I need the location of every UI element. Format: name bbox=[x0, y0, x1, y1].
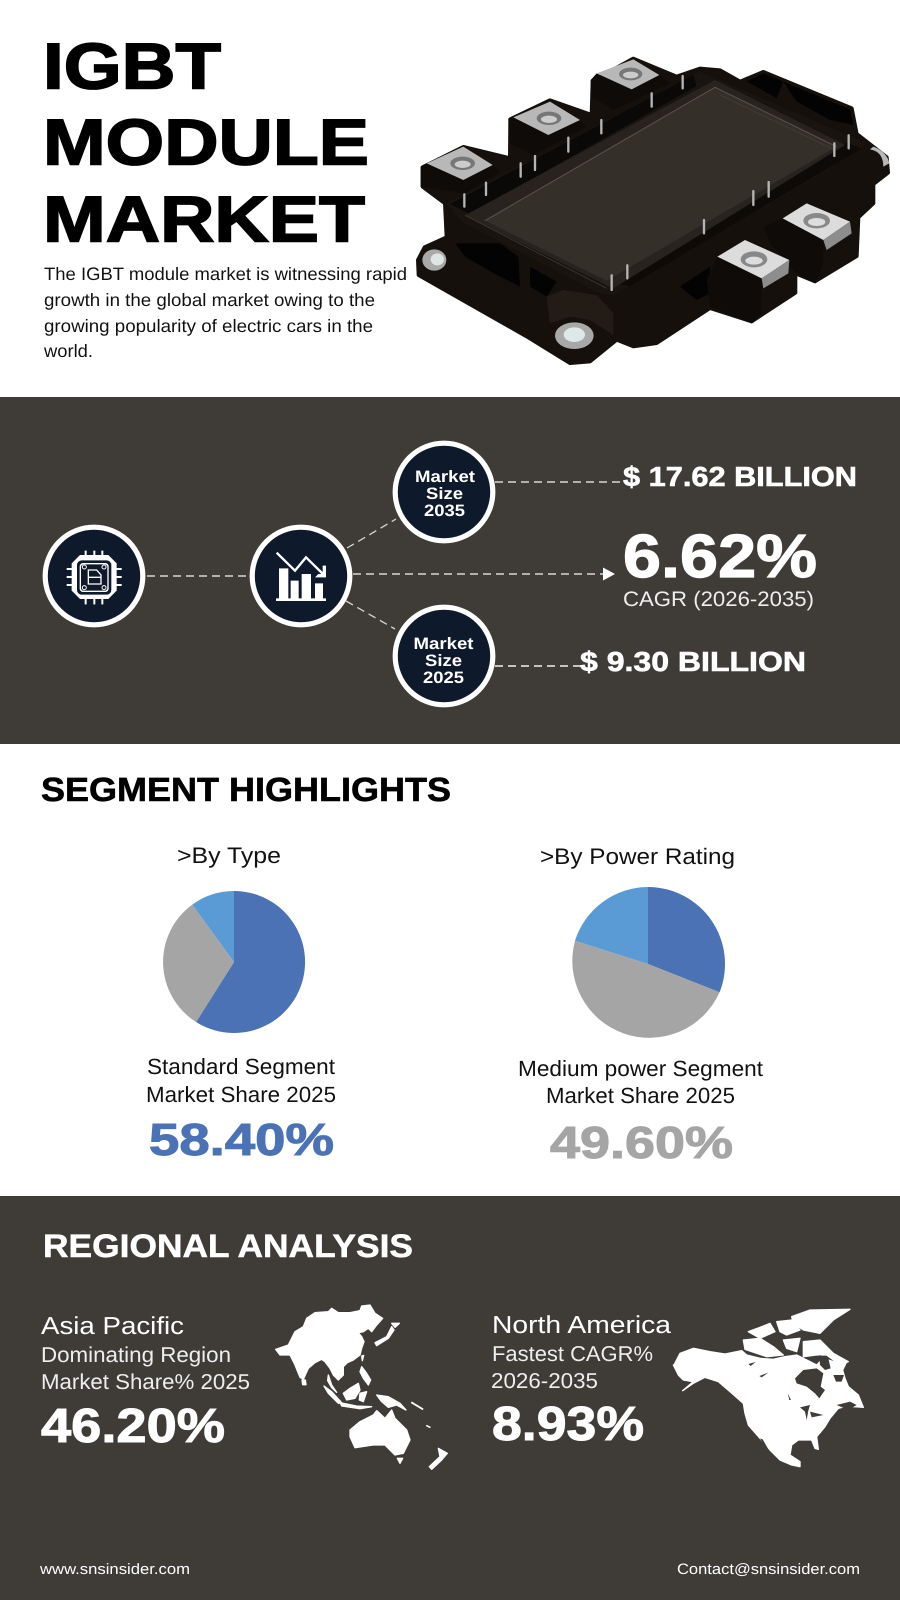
title: MARKET bbox=[43, 182, 365, 256]
region: Asia Pacific: Asia Pacific bbox=[41, 1313, 184, 1340]
label: CAGR period: CAGR (2026-2035) bbox=[623, 588, 814, 611]
value: CAGR percent: 6.62% bbox=[623, 522, 817, 590]
region: North America: 8.93% bbox=[492, 1398, 644, 1451]
label: medium power segment bbox=[518, 1056, 763, 1108]
panel: segment highlights bbox=[41, 772, 763, 1168]
callout: market size 2035 bbox=[395, 443, 493, 541]
panel: regional analysis bbox=[0, 1196, 900, 1600]
value: 2035 market size: $ 17.62 BILLION bbox=[623, 461, 857, 492]
label: standard segment bbox=[146, 1054, 336, 1107]
callout: market size 2035: Size bbox=[426, 485, 463, 503]
connector pins bbox=[464, 76, 849, 290]
pie chart: by type bbox=[163, 891, 305, 1033]
intro text: growing popularity of electric cars in the bbox=[44, 316, 373, 336]
footer: website: www.snsinsider.com bbox=[39, 1561, 190, 1578]
label: medium power segment: Medium power Segment bbox=[518, 1056, 763, 1081]
title: IGBT bbox=[43, 30, 221, 102]
subheading: by power rating: >By Power Rating bbox=[540, 844, 735, 869]
region: Asia Pacific: Market Share% 2025 bbox=[41, 1370, 250, 1394]
panel: header bbox=[43, 30, 889, 363]
heading: REGIONAL ANALYSIS bbox=[43, 1228, 413, 1264]
region: North America bbox=[491, 1312, 671, 1451]
callout: market size 2035: 2035 bbox=[424, 502, 465, 520]
IGBT module illustration bbox=[418, 59, 889, 363]
footer: contact: Contact@snsinsider.com bbox=[677, 1561, 860, 1578]
region: Asia Pacific: 46.20% bbox=[41, 1400, 225, 1453]
intro text: world. bbox=[43, 341, 93, 361]
terminals bbox=[421, 73, 823, 323]
value: 49.60%: 49.60% bbox=[550, 1117, 733, 1168]
intro text: The IGBT module market is witnessing rapid bbox=[44, 264, 407, 284]
value: 58.40%: 58.40% bbox=[149, 1114, 334, 1165]
callout: market size 2025 bbox=[395, 607, 493, 705]
label: standard segment: Market Share 2025 bbox=[146, 1082, 336, 1107]
arrow bbox=[603, 568, 615, 580]
mounting bolts bbox=[422, 249, 446, 271]
title bbox=[43, 30, 369, 256]
connector lines bbox=[147, 482, 625, 666]
callout: market size 2035: Market bbox=[415, 468, 476, 486]
icon: chip bbox=[45, 527, 143, 625]
region: North America: North America bbox=[492, 1312, 671, 1339]
heading: SEGMENT HIGHLIGHTS bbox=[41, 772, 451, 809]
subheading: by type: >By Type bbox=[177, 843, 281, 868]
region: Asia Pacific: Dominating Region bbox=[41, 1343, 231, 1367]
region: Asia Pacific bbox=[41, 1313, 250, 1453]
callout: market size 2025: Market bbox=[414, 635, 474, 653]
label: standard segment: Standard Segment bbox=[147, 1054, 335, 1079]
map: North America bbox=[673, 1309, 863, 1467]
intro text: growth in the global market owing to the bbox=[44, 290, 375, 310]
pie chart: by power rating bbox=[572, 887, 725, 1038]
icon: market chart bbox=[252, 527, 350, 625]
intro text bbox=[43, 264, 407, 361]
callout: market size 2025: 2025 bbox=[423, 669, 464, 687]
label: medium power segment: Market Share 2025 bbox=[546, 1083, 735, 1108]
value: 2025 market size: $ 9.30 BILLION bbox=[580, 646, 806, 677]
title: MODULE bbox=[43, 106, 369, 178]
region: North America: 2026-2035 bbox=[491, 1369, 598, 1393]
callout: market size 2025: Size bbox=[425, 652, 462, 670]
region: North America: Fastest CAGR% bbox=[492, 1342, 653, 1366]
map: Asia Pacific bbox=[276, 1305, 447, 1469]
panel: market size bbox=[0, 397, 900, 744]
